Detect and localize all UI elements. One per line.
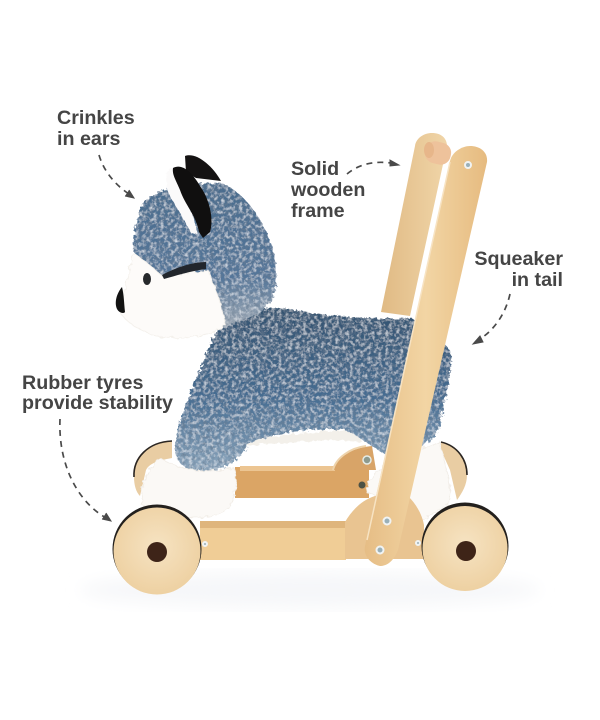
arrow: rubber tyres bbox=[60, 419, 111, 521]
lower bracket bbox=[345, 496, 424, 559]
metal bolts bbox=[203, 162, 471, 554]
base bar bbox=[200, 521, 346, 560]
ear front with white edge bbox=[166, 167, 212, 238]
front right wheel bbox=[422, 502, 508, 591]
label: solid wooden frame: frame bbox=[291, 200, 345, 222]
front wooden post bbox=[365, 139, 487, 566]
label: rubber tyres provide stability: provide stability bbox=[22, 392, 173, 414]
eye band, eye and nose bbox=[116, 262, 206, 313]
front left wheel bbox=[112, 504, 202, 594]
upper cross bar and bracket bbox=[235, 446, 376, 498]
arrow: squeaker in tail bbox=[473, 294, 510, 344]
label: crinkles in ears bbox=[57, 107, 135, 150]
label: crinkles in ears: in ears bbox=[57, 128, 121, 150]
label: solid wooden frame bbox=[290, 158, 365, 222]
label: squeaker in tail: in tail bbox=[512, 269, 563, 291]
white muzzle bbox=[120, 253, 225, 338]
label: rubber tyres provide stability: Rubber tyres bbox=[22, 372, 143, 394]
label: solid wooden frame: Solid bbox=[291, 158, 339, 180]
label: squeaker in tail: Squeaker bbox=[474, 248, 563, 270]
arrow: solid wooden frame bbox=[347, 160, 399, 174]
body fur bbox=[175, 308, 451, 472]
head fur bbox=[134, 183, 276, 328]
back wooden post bbox=[381, 133, 447, 316]
white belly fluff bbox=[232, 428, 362, 448]
ear back (black) bbox=[185, 155, 221, 181]
floor shadow bbox=[80, 572, 540, 608]
label: crinkles in ears: Crinkles bbox=[57, 107, 135, 129]
label: rubber tyres provide stability bbox=[22, 372, 173, 414]
arrow: crinkles in ears bbox=[99, 155, 134, 198]
label: squeaker in tail bbox=[474, 248, 563, 291]
rear wheels bbox=[134, 441, 467, 500]
label: solid wooden frame: wooden bbox=[290, 179, 365, 201]
white paws bbox=[142, 442, 450, 522]
